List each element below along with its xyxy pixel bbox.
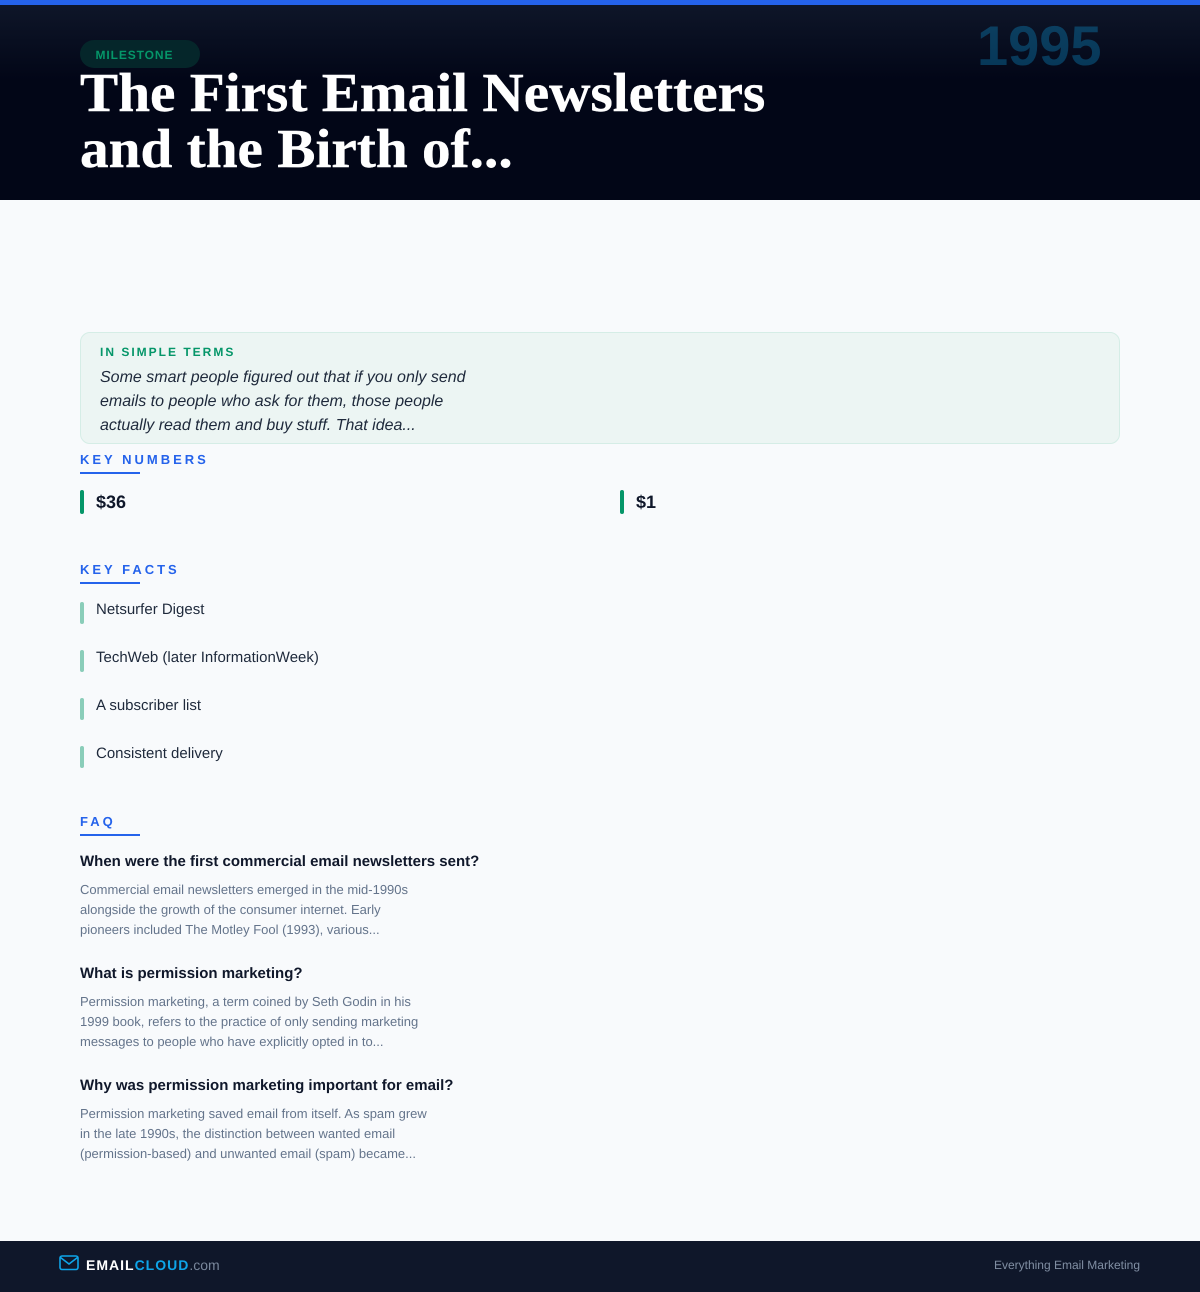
fact 1: Netsurfer Digest: [96, 601, 204, 618]
year: 1995: [977, 14, 1102, 77]
faq answer 2: 1999 book, refers to the practice of only sending marketing: [80, 1014, 418, 1029]
faq question 2: What is permission marketing?: [80, 965, 303, 982]
faq answer 2: messages to people who have explicitly opted in to...: [80, 1034, 384, 1049]
faq answer 3: [80, 1106, 427, 1161]
title: The First Email Newsletters: [80, 62, 765, 123]
panel label: IN SIMPLE TERMS: [100, 345, 235, 359]
fact 1: [80, 601, 204, 624]
faq question 1: When were the first commercial email newsletters sent?: [80, 853, 479, 870]
faq answer 1: pioneers included The Motley Fool (1993), various...: [80, 922, 380, 937]
heading: key facts: KEY FACTS: [80, 562, 180, 577]
stat: $1: $1: [636, 492, 656, 512]
faq answer 3: in the late 1990s, the distinction between wanted email: [80, 1126, 395, 1141]
logo wordmark: EMAILCLOUD.com: [86, 1257, 220, 1273]
faq answer 1: alongside the growth of the consumer internet. Early: [80, 902, 381, 917]
footer: [0, 1241, 1200, 1292]
fact 3: [80, 697, 201, 720]
title: and the Birth of...: [80, 118, 513, 179]
stat: $36: [80, 490, 126, 514]
faq answer 1: [80, 882, 408, 937]
panel text: actually read them and buy stuff. That idea...: [100, 417, 416, 434]
title: [80, 62, 765, 179]
header banner: [0, 0, 1200, 200]
heading: faq: FAQ: [80, 814, 116, 829]
panel text: emails to people who ask for them, those people: [100, 393, 443, 410]
fact 2: [80, 649, 319, 672]
tagline: Everything Email Marketing: [994, 1258, 1140, 1272]
top accent bar: [0, 0, 1200, 5]
panel: in simple terms: [80, 332, 1120, 444]
faq answer 2: [80, 994, 418, 1049]
faq answer 1: Commercial email newsletters emerged in the mid-1990s: [80, 882, 408, 897]
faq answer 2: Permission marketing, a term coined by Seth Godin in his: [80, 994, 411, 1009]
stat: $1: [620, 490, 656, 514]
faq answer 3: Permission marketing saved email from itself. As spam grew: [80, 1106, 427, 1121]
icon: envelope: [59, 1255, 79, 1270]
fact 4: [80, 745, 223, 768]
fact 3: A subscriber list: [96, 697, 201, 714]
milestone badge: [80, 40, 200, 68]
fact 4: Consistent delivery: [96, 745, 223, 762]
milestone badge: MILESTONE: [96, 48, 173, 62]
panel text: Some smart people figured out that if you only send: [100, 369, 466, 386]
stat: $36: $36: [96, 492, 126, 512]
faq answer 3: (permission-based) and unwanted email (spam) became...: [80, 1146, 416, 1161]
fact 2: TechWeb (later InformationWeek): [96, 649, 319, 666]
heading: key numbers: KEY NUMBERS: [80, 452, 209, 467]
panel text: [100, 369, 466, 434]
faq question 3: Why was permission marketing important for email?: [80, 1077, 453, 1094]
